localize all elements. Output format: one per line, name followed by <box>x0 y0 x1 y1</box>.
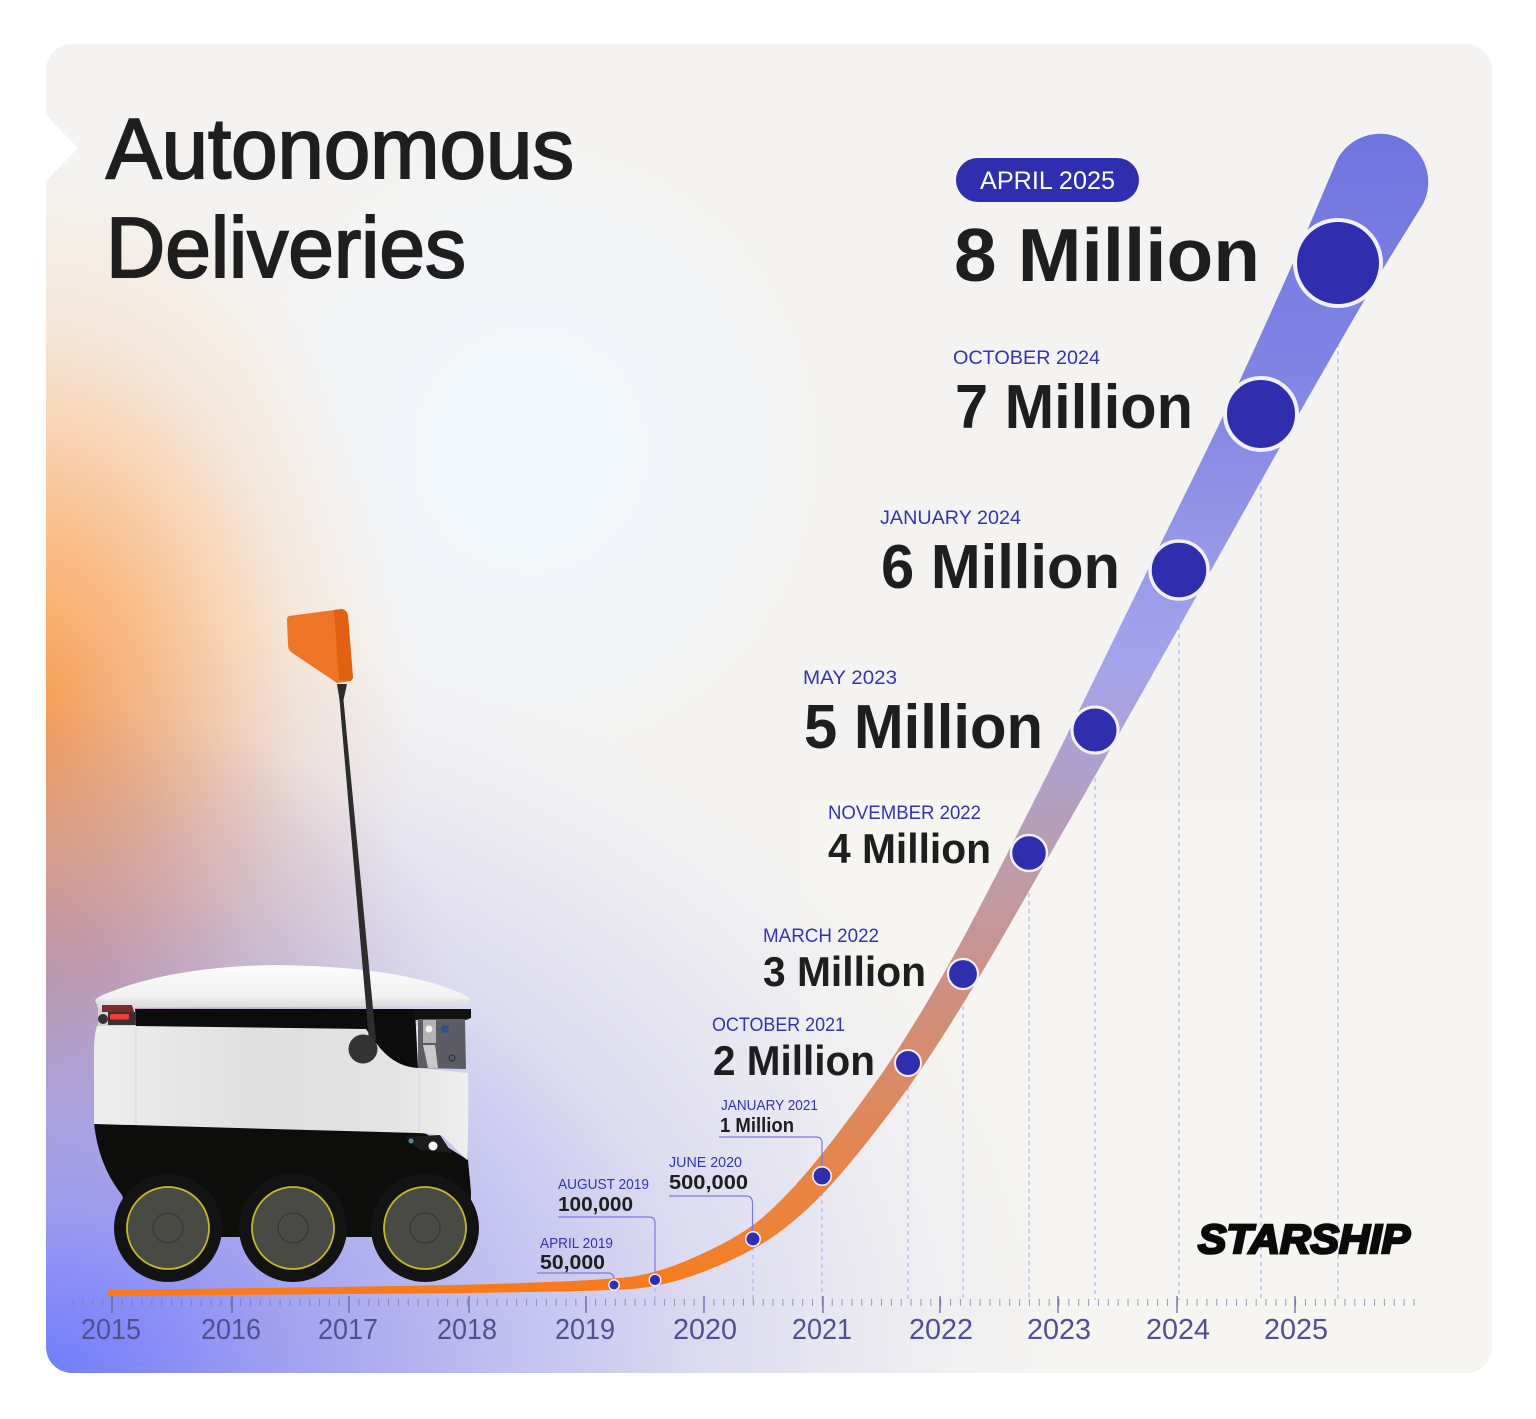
milestone: 6 million <box>880 508 1208 602</box>
milestone: 500,000 <box>669 1154 760 1246</box>
timeline axis <box>72 1296 1415 1346</box>
milestone: 500,000: 500,000 <box>669 1172 748 1194</box>
robot black window band <box>135 1009 418 1068</box>
milestone: 2 million: 2 Million <box>713 1037 875 1084</box>
milestone: 500,000: JUNE 2020 <box>669 1154 742 1171</box>
milestone: 4 million: NOVEMBER 2022 <box>828 803 981 824</box>
timeline axis: 2021 <box>792 1314 852 1346</box>
robot white body <box>94 1026 468 1160</box>
timeline axis: 2017 <box>318 1314 378 1346</box>
milestone: 5 million: 5 Million <box>804 693 1043 762</box>
milestone: 3 million <box>763 926 978 995</box>
milestone: 50,000 <box>540 1235 619 1290</box>
milestone: 1 million <box>720 1097 831 1185</box>
title: Autonomous <box>106 102 574 197</box>
milestone: 50,000: 50,000 <box>540 1252 605 1274</box>
robot flag <box>287 609 353 683</box>
timeline axis: 2019 <box>555 1314 615 1346</box>
robot tail light <box>98 1005 136 1026</box>
robot flag pole <box>337 684 376 1041</box>
robot <box>94 609 479 1282</box>
robot sensor head <box>415 1009 471 1069</box>
timeline axis: 2018 <box>437 1314 497 1346</box>
milestone: 3 million: 3 Million <box>763 948 926 995</box>
robot front headlight <box>405 1135 452 1153</box>
timeline axis: 2024 <box>1146 1314 1210 1346</box>
milestone: 7 million: 7 Million <box>955 373 1193 442</box>
title <box>106 102 574 296</box>
timeline axis: 2016 <box>201 1314 261 1346</box>
timeline axis: 2015 <box>81 1314 141 1346</box>
milestone: 4 million: 4 Million <box>828 825 991 872</box>
milestone: 8 million <box>954 158 1381 306</box>
milestone: 7 million <box>953 348 1297 450</box>
leader lines for early milestones <box>537 1137 822 1280</box>
milestone: 100,000 <box>558 1176 661 1286</box>
milestone: 100,000: AUGUST 2019 <box>558 1176 649 1193</box>
growth ribbon curve <box>108 134 1428 1296</box>
milestone: 5 million <box>803 668 1118 762</box>
starship logo: STARSHIP <box>1198 1216 1411 1262</box>
robot wheels <box>114 1174 479 1282</box>
milestone: 6 million: 6 Million <box>881 533 1120 602</box>
milestone: 5 million: MAY 2023 <box>803 668 897 689</box>
milestone: 2 million: OCTOBER 2021 <box>712 1015 845 1036</box>
milestone: 8 million: APRIL 2025 <box>980 167 1115 195</box>
milestone: 100,000: 100,000 <box>558 1194 633 1216</box>
milestone: 8 million: 8 Million <box>954 213 1260 297</box>
title: Deliveries <box>106 201 466 296</box>
milestone: 1 million: 1 Million <box>720 1115 794 1137</box>
timeline axis: 2023 <box>1027 1314 1091 1346</box>
milestone: 50,000: APRIL 2019 <box>540 1235 613 1252</box>
milestone: 4 million <box>828 803 1047 872</box>
timeline axis: 2020 <box>673 1314 737 1346</box>
milestone: 6 million: JANUARY 2024 <box>880 508 1021 529</box>
robot seam lines <box>136 1027 419 1133</box>
timeline axis: 2022 <box>909 1314 973 1346</box>
milestone: 3 million: MARCH 2022 <box>763 926 879 947</box>
milestone: 2 million <box>712 1015 921 1084</box>
robot lower dark chassis <box>94 1122 471 1237</box>
robot lid <box>95 965 470 1008</box>
robot pole knob <box>348 1034 378 1064</box>
dashed drop lines <box>655 263 1338 1300</box>
milestone: 1 million: JANUARY 2021 <box>721 1097 818 1114</box>
milestone: 7 million: OCTOBER 2024 <box>953 348 1100 369</box>
timeline axis: 2025 <box>1264 1314 1328 1346</box>
